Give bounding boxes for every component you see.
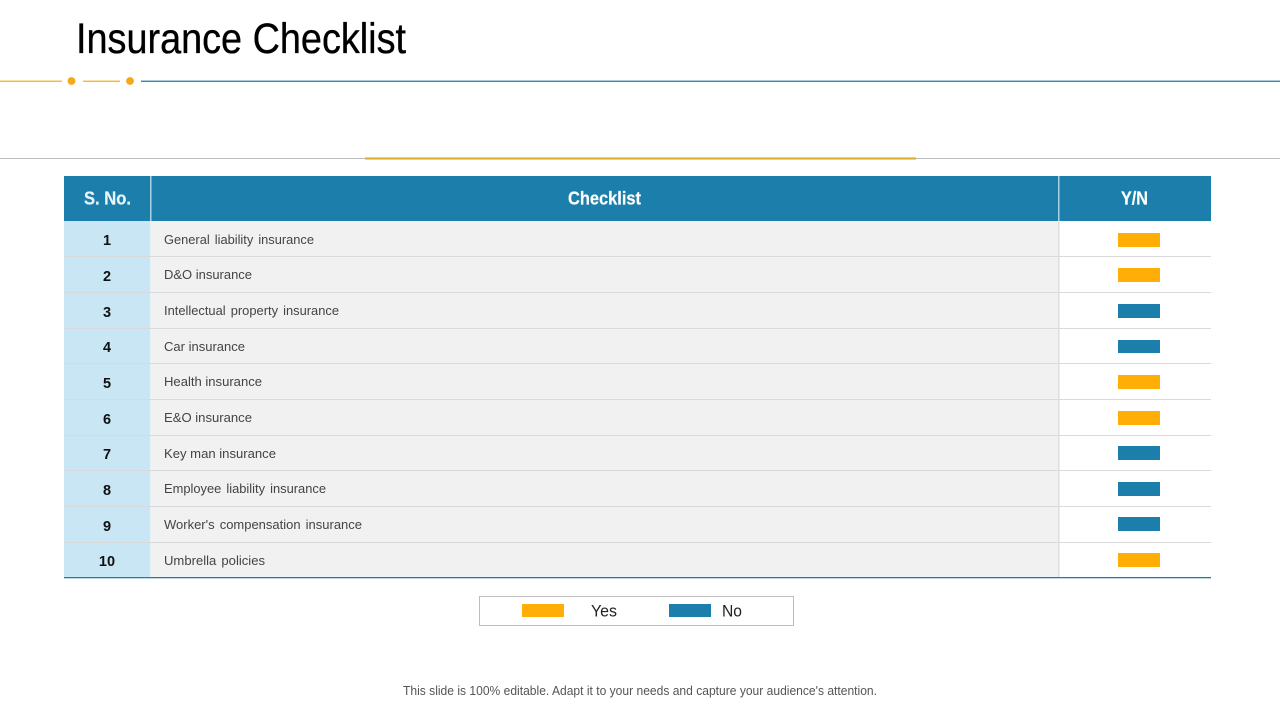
row 2: D&O insurance (164, 267, 252, 282)
row 9: 9 (103, 519, 111, 535)
row 5: 5 (103, 376, 111, 392)
row 1 (103, 232, 1160, 249)
checklist table (64, 176, 1211, 578)
row 9: Worker's compensation insurance (164, 517, 362, 532)
row 2 (103, 267, 1160, 285)
row 10: Umbrella policies (164, 553, 265, 568)
row 6: 6 (103, 412, 111, 428)
row 3 (103, 303, 1160, 321)
row 1: 1 (103, 233, 111, 249)
row 8 (103, 481, 1160, 499)
table header: S. No. (84, 188, 131, 208)
row 5: Health insurance (164, 374, 262, 389)
legend: No (722, 602, 742, 620)
subtitle divider (0, 157, 1280, 160)
row 10: 10 (99, 554, 115, 570)
row 10 (99, 553, 1160, 570)
row 6: E&O insurance (164, 410, 252, 425)
footer note: This slide is 100% editable. Adapt it to your needs and capture your audience's attention. (403, 684, 877, 698)
table header (64, 176, 1211, 221)
row 7 (103, 446, 1160, 463)
row 8: 8 (103, 483, 111, 499)
row 7: 7 (103, 447, 111, 463)
row 7: Key man insurance (164, 446, 276, 461)
row 3: 3 (103, 305, 111, 321)
title divider with dots (0, 77, 1280, 85)
row 2: 2 (103, 269, 111, 285)
table header: Y/N (1121, 188, 1148, 208)
row 8: Employee liability insurance (164, 481, 326, 496)
row 4: Car insurance (164, 339, 245, 354)
title: Insurance Checklist (76, 15, 406, 63)
row 4 (103, 339, 1160, 356)
legend: Yes (591, 602, 617, 620)
row 9 (103, 517, 1160, 535)
row 6 (103, 410, 1160, 428)
table body backgrounds (64, 221, 1211, 578)
row 4: 4 (103, 340, 111, 356)
table header: Checklist (568, 188, 641, 208)
row 1: General liability insurance (164, 232, 314, 247)
row 3: Intellectual property insurance (164, 303, 339, 318)
row 5 (103, 374, 1160, 392)
legend (480, 596, 794, 626)
